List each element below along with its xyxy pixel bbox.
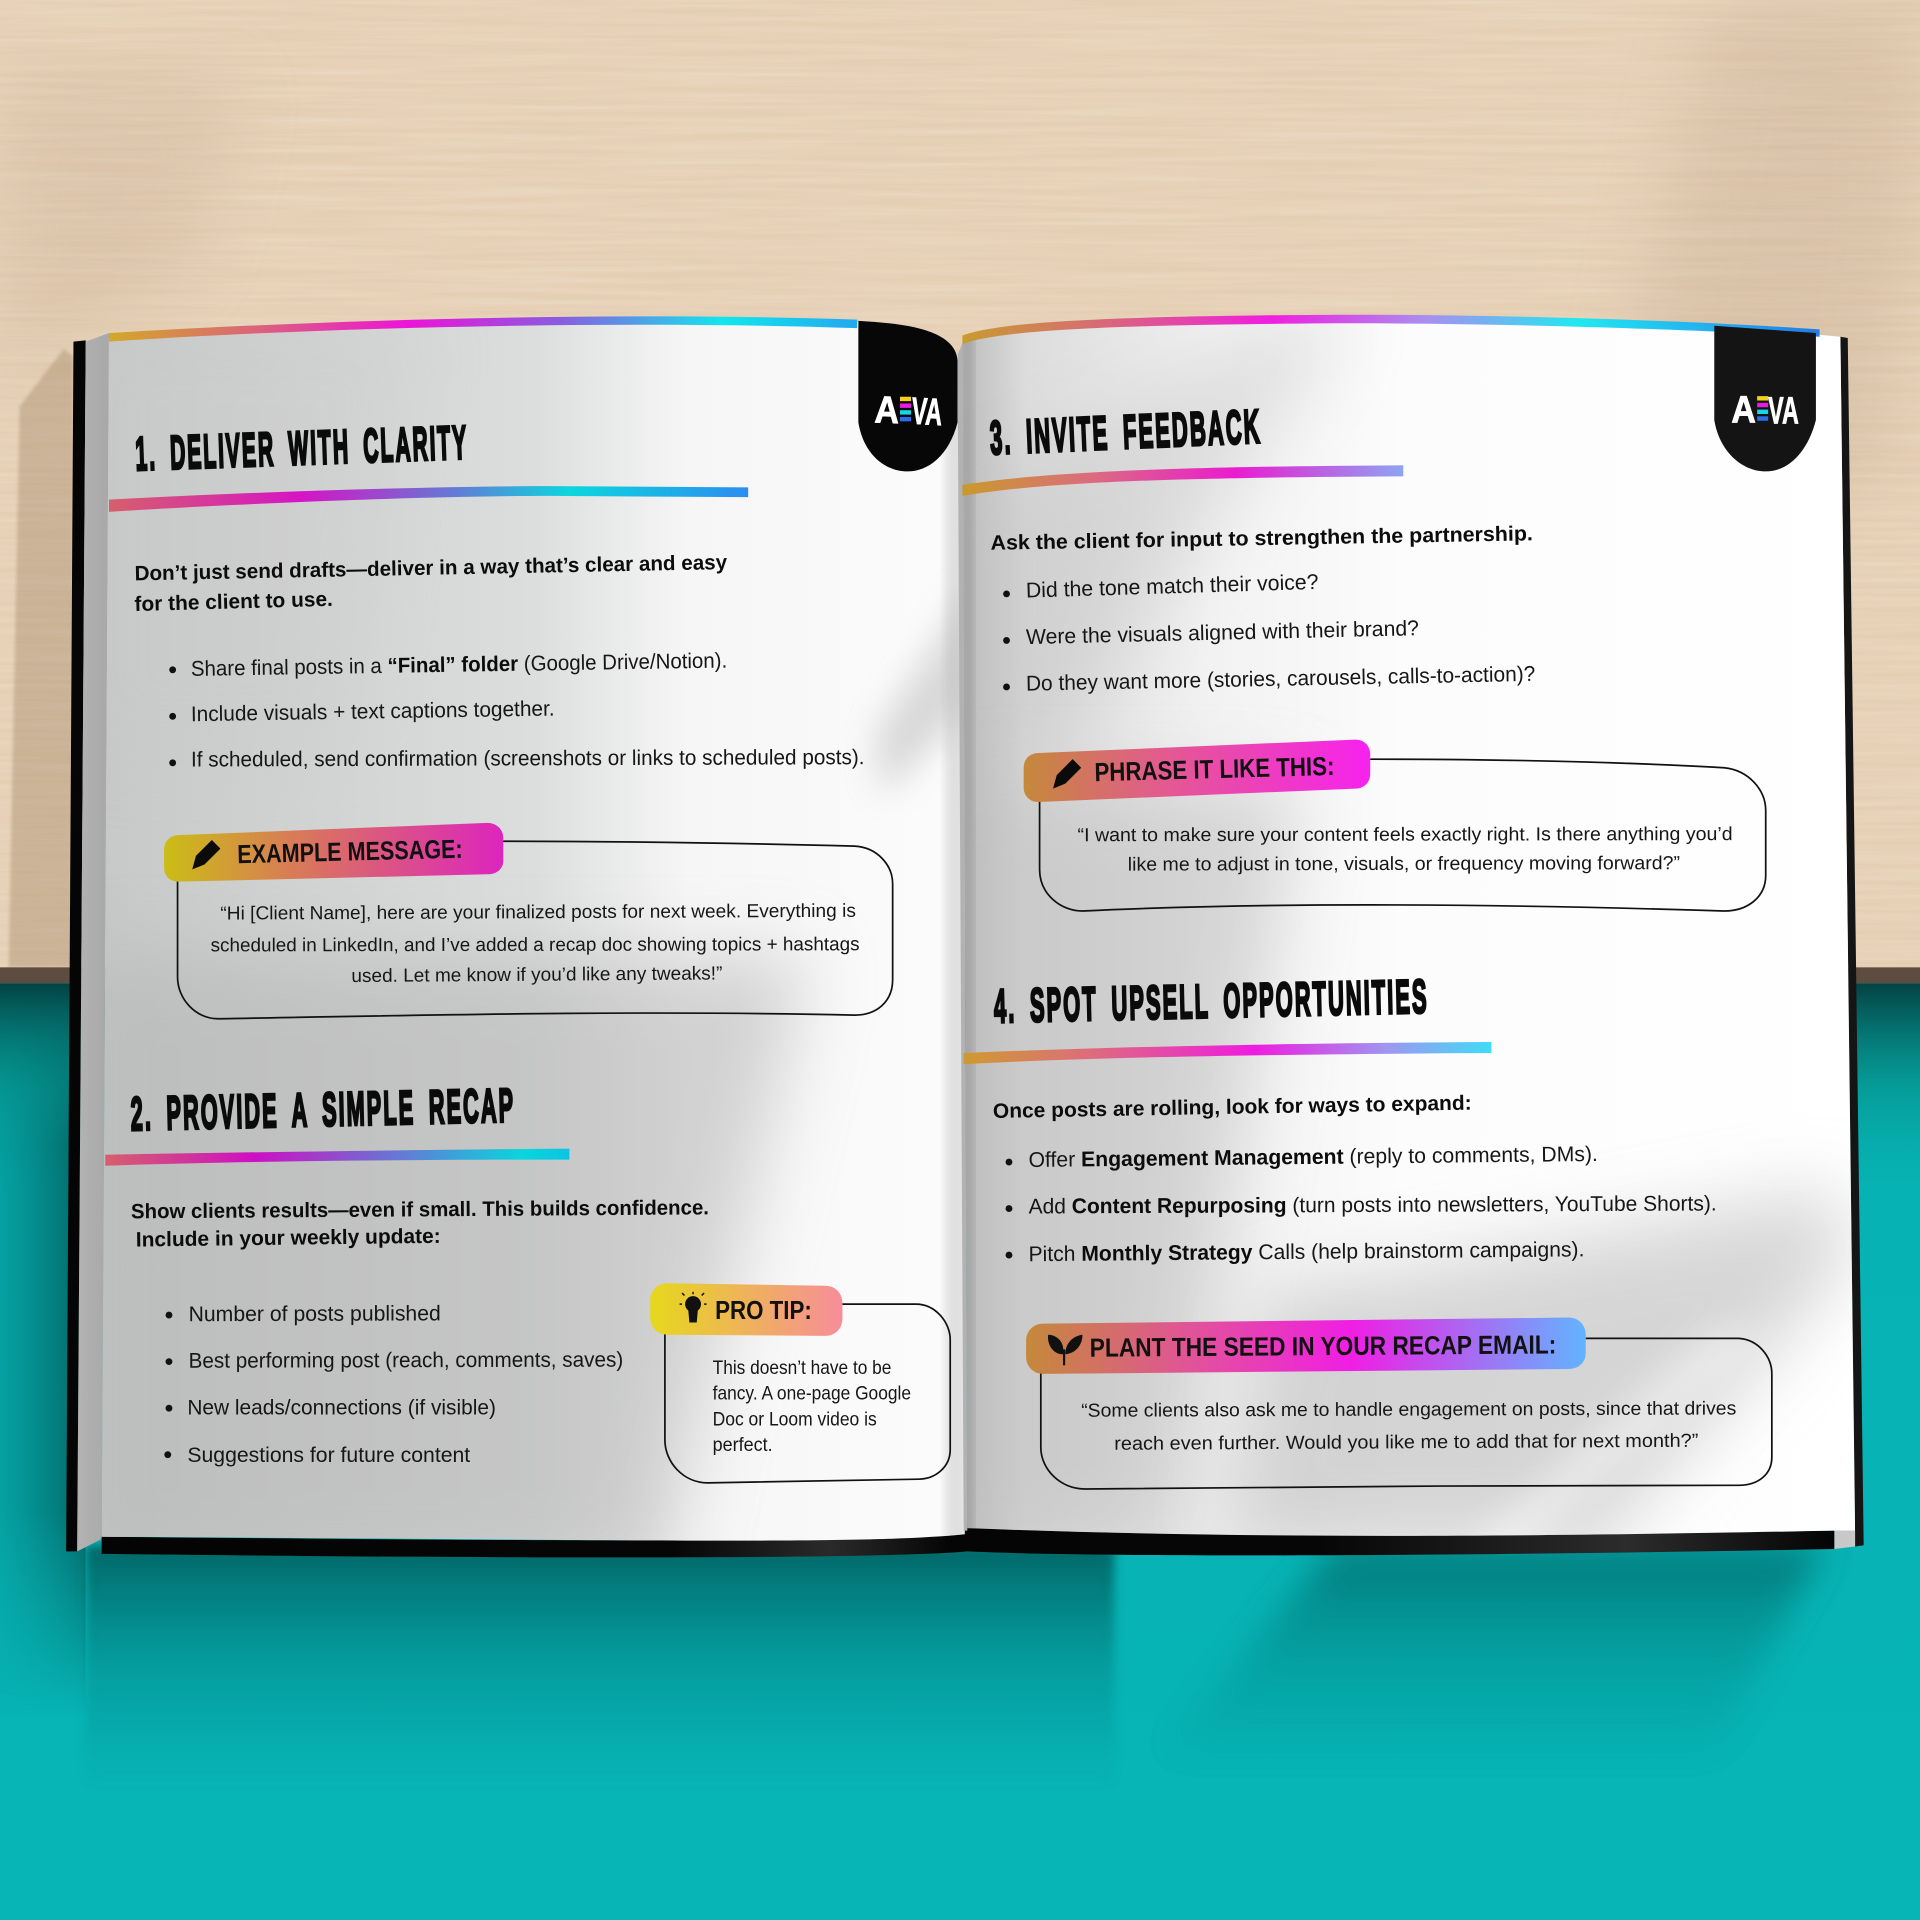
panel: section 3 invite feedback [962, 400, 1766, 911]
background: wood tabletop [0, 0, 1920, 987]
bullet list 1: If scheduled, send confirmation (screenshots or links to scheduled posts). [191, 745, 865, 772]
bullet list 2: Best performing post (reach, comments, saves) [189, 1348, 623, 1373]
callout quote [211, 901, 860, 987]
bookmark tab with logo left [858, 321, 958, 471]
bullet list 3 [1003, 570, 1536, 696]
panel: section 4 spot upsell opportunities [964, 971, 1772, 1489]
bookmark tab with logo left: A [874, 389, 900, 432]
bullet list 2: Suggestions for future content [187, 1443, 470, 1467]
callout text [713, 1358, 911, 1456]
bullet list 2: New leads/connections (if visible) [187, 1395, 496, 1419]
gradient rule 3 [962, 465, 1403, 496]
callout quote: used. Let me know if you’d like any tweaks!” [351, 963, 722, 987]
callout quote: reach even further. Would you like me to add that for next month?” [1114, 1431, 1698, 1455]
top edge colour strip left [109, 316, 857, 342]
bullet list 2 [164, 1301, 623, 1467]
bookmark tab with logo right: VA [1768, 391, 1799, 433]
panel: section 1 deliver with clarity [109, 417, 893, 1019]
right page sheet with shading [955, 306, 1867, 1555]
callout quote: “I want to make sure your content feels exactly right. Is there anything you’d [1078, 824, 1733, 846]
book shadow on wood [9, 349, 73, 967]
panel: section 2 provide a simple recap: 2. PROVIDE A SIMPLE RECAP [130, 1079, 516, 1141]
callout: plant the seed: PLANT THE SEED IN YOUR RECAP EMAIL: [1090, 1329, 1556, 1363]
callout text: perfect. [713, 1435, 773, 1456]
bullet list 1: Include visuals + text captions together. [191, 697, 555, 726]
left page [73, 306, 980, 1580]
callout: example message: EXAMPLE MESSAGE: [237, 834, 463, 869]
intro text 1 [134, 551, 728, 616]
right page [955, 306, 1867, 1555]
callout quote [1078, 824, 1733, 876]
panel: section 3 invite feedback: 3. INVITE FEEDBACK [989, 400, 1263, 465]
left page sheet with shading [73, 306, 980, 1580]
callout: example message [164, 823, 893, 1019]
bullet list 4: Offer Engagement Management (reply to comments, DMs). [1028, 1142, 1598, 1172]
bullet list 1: Share final posts in a “Final” folder (Google Drive/Notion). [191, 648, 727, 681]
callout text: fancy. A one-page Google [713, 1384, 911, 1405]
intro text 1: Don’t just send drafts—deliver in a way that’s clear and easy [134, 551, 728, 585]
background: teal surface [0, 983, 1920, 1742]
icon: pencil [1053, 759, 1081, 789]
intro text 3: Ask the client for input to strengthen the partnership. [990, 522, 1533, 555]
icon: pencil [192, 840, 220, 869]
callout text: Doc or Loom video is [713, 1409, 877, 1430]
intro text 2 [131, 1196, 709, 1252]
top edge colour strip right [962, 315, 1820, 344]
callout: pro tip: PRO TIP: [715, 1295, 812, 1325]
panel: section 2 provide a simple recap [105, 1079, 950, 1483]
callout quote: “Some clients also ask me to handle engagement on posts, since that drives [1081, 1398, 1736, 1422]
bullet list 3: Did the tone match their voice? [1026, 570, 1319, 603]
gradient rule 2 [105, 1149, 569, 1166]
bullet list 4 [1006, 1142, 1717, 1266]
bullet list 2: Number of posts published [189, 1301, 441, 1326]
intro text 4: Once posts are rolling, look for ways to expand: [993, 1092, 1472, 1123]
icon: light bulb [680, 1292, 707, 1322]
bullet list 4: Pitch Monthly Strategy Calls (help brainstorm campaigns). [1028, 1237, 1585, 1266]
callout: plant the seed [1026, 1318, 1772, 1489]
callout: phrase it like this: PHRASE IT LIKE THIS: [1094, 751, 1335, 787]
callout: pro tip [650, 1283, 950, 1483]
callout quote: “Hi [Client Name], here are your finalized posts for next week. Everything is [220, 901, 856, 925]
book: cover and page blocks [66, 333, 1864, 1557]
bullet list 3: Do they want more (stories, carousels, calls-to-action)? [1026, 662, 1536, 696]
intro text 1: for the client to use. [134, 588, 333, 616]
gradient rule 4 [964, 1042, 1491, 1064]
bookmark tab with logo right [1714, 326, 1816, 471]
callout quote: like me to adjust in tone, visuals, or frequency moving forward?” [1128, 853, 1680, 876]
panel: section 4 spot upsell opportunities: 4. SPOT UPSELL OPPORTUNITIES [993, 971, 1429, 1033]
bookmark tab with logo left: VA [911, 391, 943, 434]
bullet list 1 [169, 648, 865, 772]
bullet list 3: Were the visuals aligned with their brand? [1026, 616, 1419, 649]
icon: plant sprout [1048, 1335, 1082, 1365]
callout quote [1081, 1398, 1736, 1455]
callout: phrase it like this [1024, 740, 1766, 911]
bullet list 4: Add Content Repurposing (turn posts into newsletters, YouTube Shorts). [1028, 1191, 1717, 1218]
panel: section 1 deliver with clarity: 1. DELIVER WITH CLARITY [134, 417, 469, 481]
gutter strip [958, 343, 967, 1531]
intro text 2: Show clients results—even if small. This builds confidence. [131, 1196, 709, 1223]
bookmark tab with logo right: A [1731, 389, 1756, 431]
callout text: This doesn’t have to be [713, 1358, 891, 1379]
gradient rule 1 [109, 486, 748, 512]
intro text 2: Include in your weekly update: [136, 1225, 441, 1252]
callout quote: scheduled in LinkedIn, and I’ve added a recap doc showing topics + hashtags [211, 934, 860, 956]
